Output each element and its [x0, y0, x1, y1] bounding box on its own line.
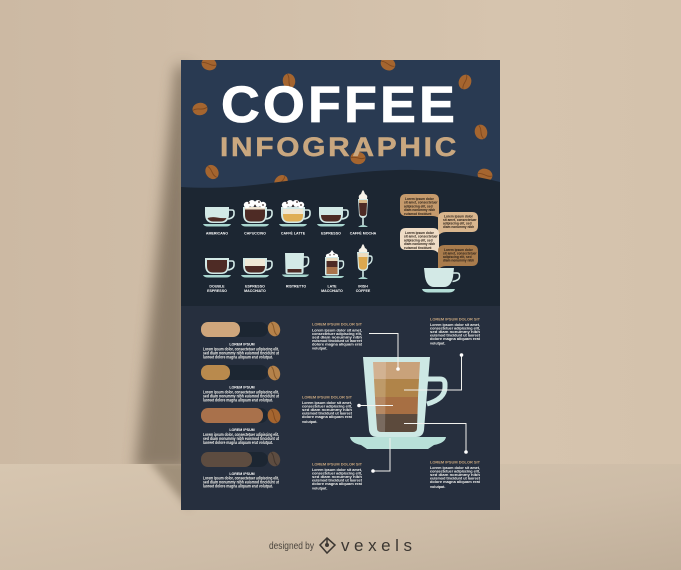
text block: bottom right: dolore magna aliquam erat [430, 480, 481, 484]
text block: top right: volutpat. [430, 342, 445, 346]
subtitle: INFOGRAPHIC: INFOGRAPHIC [220, 132, 459, 162]
text block: top left: sed diam nonummy nibh [312, 336, 363, 340]
coffee layers [373, 362, 420, 432]
speech bubble 4: Lorem ipsum dolor [444, 248, 473, 252]
text block: top right: consectetuer adipiscing elit, [430, 326, 480, 330]
roast bar 2 [201, 364, 282, 402]
text block: middle left: sed diam nonummy nibh [302, 408, 353, 412]
text block: bottom left: dolore magna aliquam erat [312, 482, 363, 486]
speech bubble 4: sit amet, consectetuer [443, 252, 477, 256]
speech bubble 4: diam nonummy nibh [443, 258, 474, 262]
cup: caffe latte [279, 200, 310, 226]
roast bar 3: LOREM IPSUM [229, 428, 255, 432]
text block: bottom right [430, 460, 481, 489]
roast bar 2: Lorem ipsum dolor, consectetuer adipiscing elit, [203, 390, 279, 394]
text block: bottom left: sed diam nonummy nibh [312, 475, 363, 479]
lower section background [181, 306, 500, 510]
label: irish coffee: IRISH [358, 284, 368, 288]
poster shadow on floor [148, 464, 181, 504]
text block: bottom right: consectetuer adipiscing elit, [430, 470, 480, 474]
speech bubble 3: sit amet, consectetuer [404, 235, 438, 239]
label: capuccino: CAPUCCINO [244, 232, 266, 236]
text block: bottom left: LOREM IPSUM DOLOR SIT [312, 462, 363, 466]
text block: top left: consectetuer adipiscing elit, [312, 332, 362, 336]
speech bubble 4 [438, 245, 478, 270]
speech bubble 2: Lorem ipsum dolor [444, 214, 473, 218]
text block: top right: LOREM IPSUM DOLOR SIT [430, 318, 481, 322]
label: espresso macchiato: MACCHIATO [244, 289, 266, 293]
coffee beans scattered [192, 60, 492, 182]
chart: layered coffee cup diagram [350, 334, 468, 473]
label: irish coffee: COFFEE [356, 289, 371, 293]
text block: middle left: LOREM IPSUM DOLOR SIT [302, 396, 353, 400]
text block: middle left: consectetuer adipiscing elit, [302, 404, 352, 408]
text block: bottom left: consectetuer adipiscing elit, [312, 472, 362, 476]
roast bar 1: Lorem ipsum dolor, consectetuer adipiscing elit, [203, 346, 279, 352]
roast bar 2: laoreet dolore magna aliquam erat volutpat. [203, 398, 273, 402]
speech bubble 3: diam nonummy nibh [404, 242, 435, 246]
roast bar 4: laoreet dolore magna aliquam erat volutpat. [203, 484, 273, 488]
cup: capuccino [241, 200, 272, 226]
text block: bottom left: Lorem ipsum dolor sit amet, [312, 468, 362, 472]
label: caffe latte: CAFFÈ LATTE [281, 230, 306, 236]
roast bar 1: laoreet dolore magna aliquam erat volutpat. [203, 354, 273, 360]
text block: top left: dolore magna aliquam erat [312, 342, 363, 346]
roast bar 4: LOREM IPSUM [229, 472, 255, 476]
label: caffe mocha: CAFFÈ MOCHA [350, 230, 377, 236]
speech bubble 1: euismod tincidunt [404, 212, 432, 216]
glass: late macchiato [322, 250, 344, 278]
speech bubble 2: diam nonummy nibh [443, 225, 474, 229]
cup: ristretto [282, 253, 309, 277]
icon: vexels diamond [320, 538, 335, 553]
label: late macchiato: LATE [327, 284, 337, 288]
poster top background [181, 60, 500, 195]
panel: speech bubbles and cup [400, 194, 478, 292]
text block: bottom left: euismod tincidunt ut laoreet [312, 478, 363, 482]
speech bubble 2: adipiscing elit, sed [443, 222, 472, 226]
text block: top left: LOREM IPSUM DOLOR SIT [312, 322, 363, 326]
text block: top left [312, 322, 363, 350]
speech bubble 4: adipiscing elit, sed [443, 255, 472, 259]
label: espresso: ESPRESSO [321, 232, 341, 236]
text block: top left: volutpat. [312, 346, 327, 350]
roast bar 1: sed diam nonummy nibh euismod tincidunt ut [203, 350, 279, 356]
text block: bottom left [312, 462, 363, 490]
text block: bottom right: sed diam nonummy nibh [430, 473, 481, 477]
label: espresso macchiato: ESPRESSO [245, 284, 265, 288]
label: late macchiato: MACCHIATO [321, 289, 343, 293]
watermark: designed by vexels [269, 536, 412, 555]
text block: bottom left: volutpat. [312, 486, 327, 490]
roast bar 4 [201, 450, 282, 488]
text block: middle left: Lorem ipsum dolor sit amet, [302, 401, 352, 405]
speech bubble 1: sit amet, consectetuer [404, 201, 438, 205]
roast bar 3 [201, 407, 282, 445]
roast bar 3: laoreet dolore magna aliquam erat volutpat. [203, 440, 273, 445]
roast bar 4: Lorem ipsum dolor, consectetuer adipiscing elit, [203, 476, 279, 480]
text block: bottom right: Lorem ipsum dolor sit amet, [430, 466, 480, 470]
callout line 1 [369, 334, 400, 371]
label: americano: AMERICANO [206, 232, 228, 236]
callout line 4 [404, 424, 468, 454]
cup: espresso [317, 207, 348, 226]
panel: coffee types [203, 190, 377, 293]
cup: double espresso [203, 258, 234, 278]
icon: white cup [422, 268, 460, 292]
glass: irish coffee [357, 244, 372, 279]
poster shadow on wall [135, 66, 190, 470]
saucer [350, 437, 446, 449]
speech bubble 1: diam nonummy nibh [404, 208, 435, 212]
roast bar 2: LOREM IPSUM [229, 386, 255, 390]
text block: top left: euismod tincidunt ut laoreet [312, 339, 363, 343]
cup body [363, 357, 430, 437]
label: ristretto: RISTRETTO [286, 284, 306, 288]
speech bubble 2 [438, 212, 478, 236]
speech bubble 3 [400, 228, 439, 254]
roast bar 3: Lorem ipsum dolor, consectetuer adipiscing elit, [203, 432, 279, 437]
text block: middle left: dolore magna aliquam erat [302, 415, 353, 419]
background floor [0, 464, 681, 570]
text block: top right: sed diam nonummy nibh [430, 330, 481, 334]
text block: bottom right: euismod tincidunt ut laoreet [430, 476, 481, 480]
text block: middle left: euismod tincidunt ut laoreet [302, 412, 353, 416]
callout line 2 [404, 353, 463, 390]
roast bar 2: sed diam nonummy nibh euismod tincidunt ut [203, 394, 279, 398]
roast bar 1: LOREM IPSUM [229, 342, 255, 346]
cup: americano [203, 207, 234, 226]
text block: top right: dolore magna aliquam erat [430, 337, 481, 341]
text block: bottom right: LOREM IPSUM DOLOR SIT [430, 460, 481, 464]
panel: roast levels [201, 320, 282, 488]
speech bubble 3: Lorem ipsum dolor [405, 231, 434, 235]
speech bubble 1: Lorem ipsum dolor [405, 197, 434, 201]
cup handle [427, 379, 445, 404]
title: COFFEE: COFFEE [221, 76, 458, 133]
roast bar 1 [201, 320, 282, 360]
text block: middle left [302, 396, 353, 424]
text block: bottom right: volutpat. [430, 485, 445, 489]
text block: top right [430, 318, 481, 346]
poster [181, 55, 500, 510]
label: double espresso: ESPRESSO [207, 289, 227, 293]
poster mockup scene [126, 57, 681, 570]
dark wavy band [181, 170, 500, 306]
callout line 5 [371, 438, 390, 473]
speech bubble 1: adipiscing elit, sed [404, 204, 433, 208]
text block: top right: Lorem ipsum dolor sit amet, [430, 323, 480, 327]
glass: caffe mocha [358, 190, 368, 227]
roast bar 3: sed diam nonummy nibh euismod tincidunt ut [203, 436, 279, 441]
speech bubble 3: adipiscing elit, sed [404, 238, 433, 242]
text block: middle left: volutpat. [302, 420, 317, 424]
speech bubble 3: euismod tincidunt [404, 246, 432, 250]
text block: top right: euismod tincidunt ut laoreet [430, 334, 481, 338]
text block: top left: Lorem ipsum dolor sit amet, [312, 328, 362, 332]
roast bar 4: sed diam nonummy nibh euismod tincidunt ut [203, 480, 279, 484]
speech bubble 1 [400, 194, 439, 218]
vexels text: vexels [341, 536, 412, 555]
label: double espresso: DOUBLE [209, 284, 225, 288]
cup: espresso macchiato [241, 258, 272, 278]
speech bubble 2: sit amet, consectetuer [443, 218, 477, 222]
designed by text: designed by [269, 541, 314, 552]
callout line 3 [357, 404, 393, 407]
